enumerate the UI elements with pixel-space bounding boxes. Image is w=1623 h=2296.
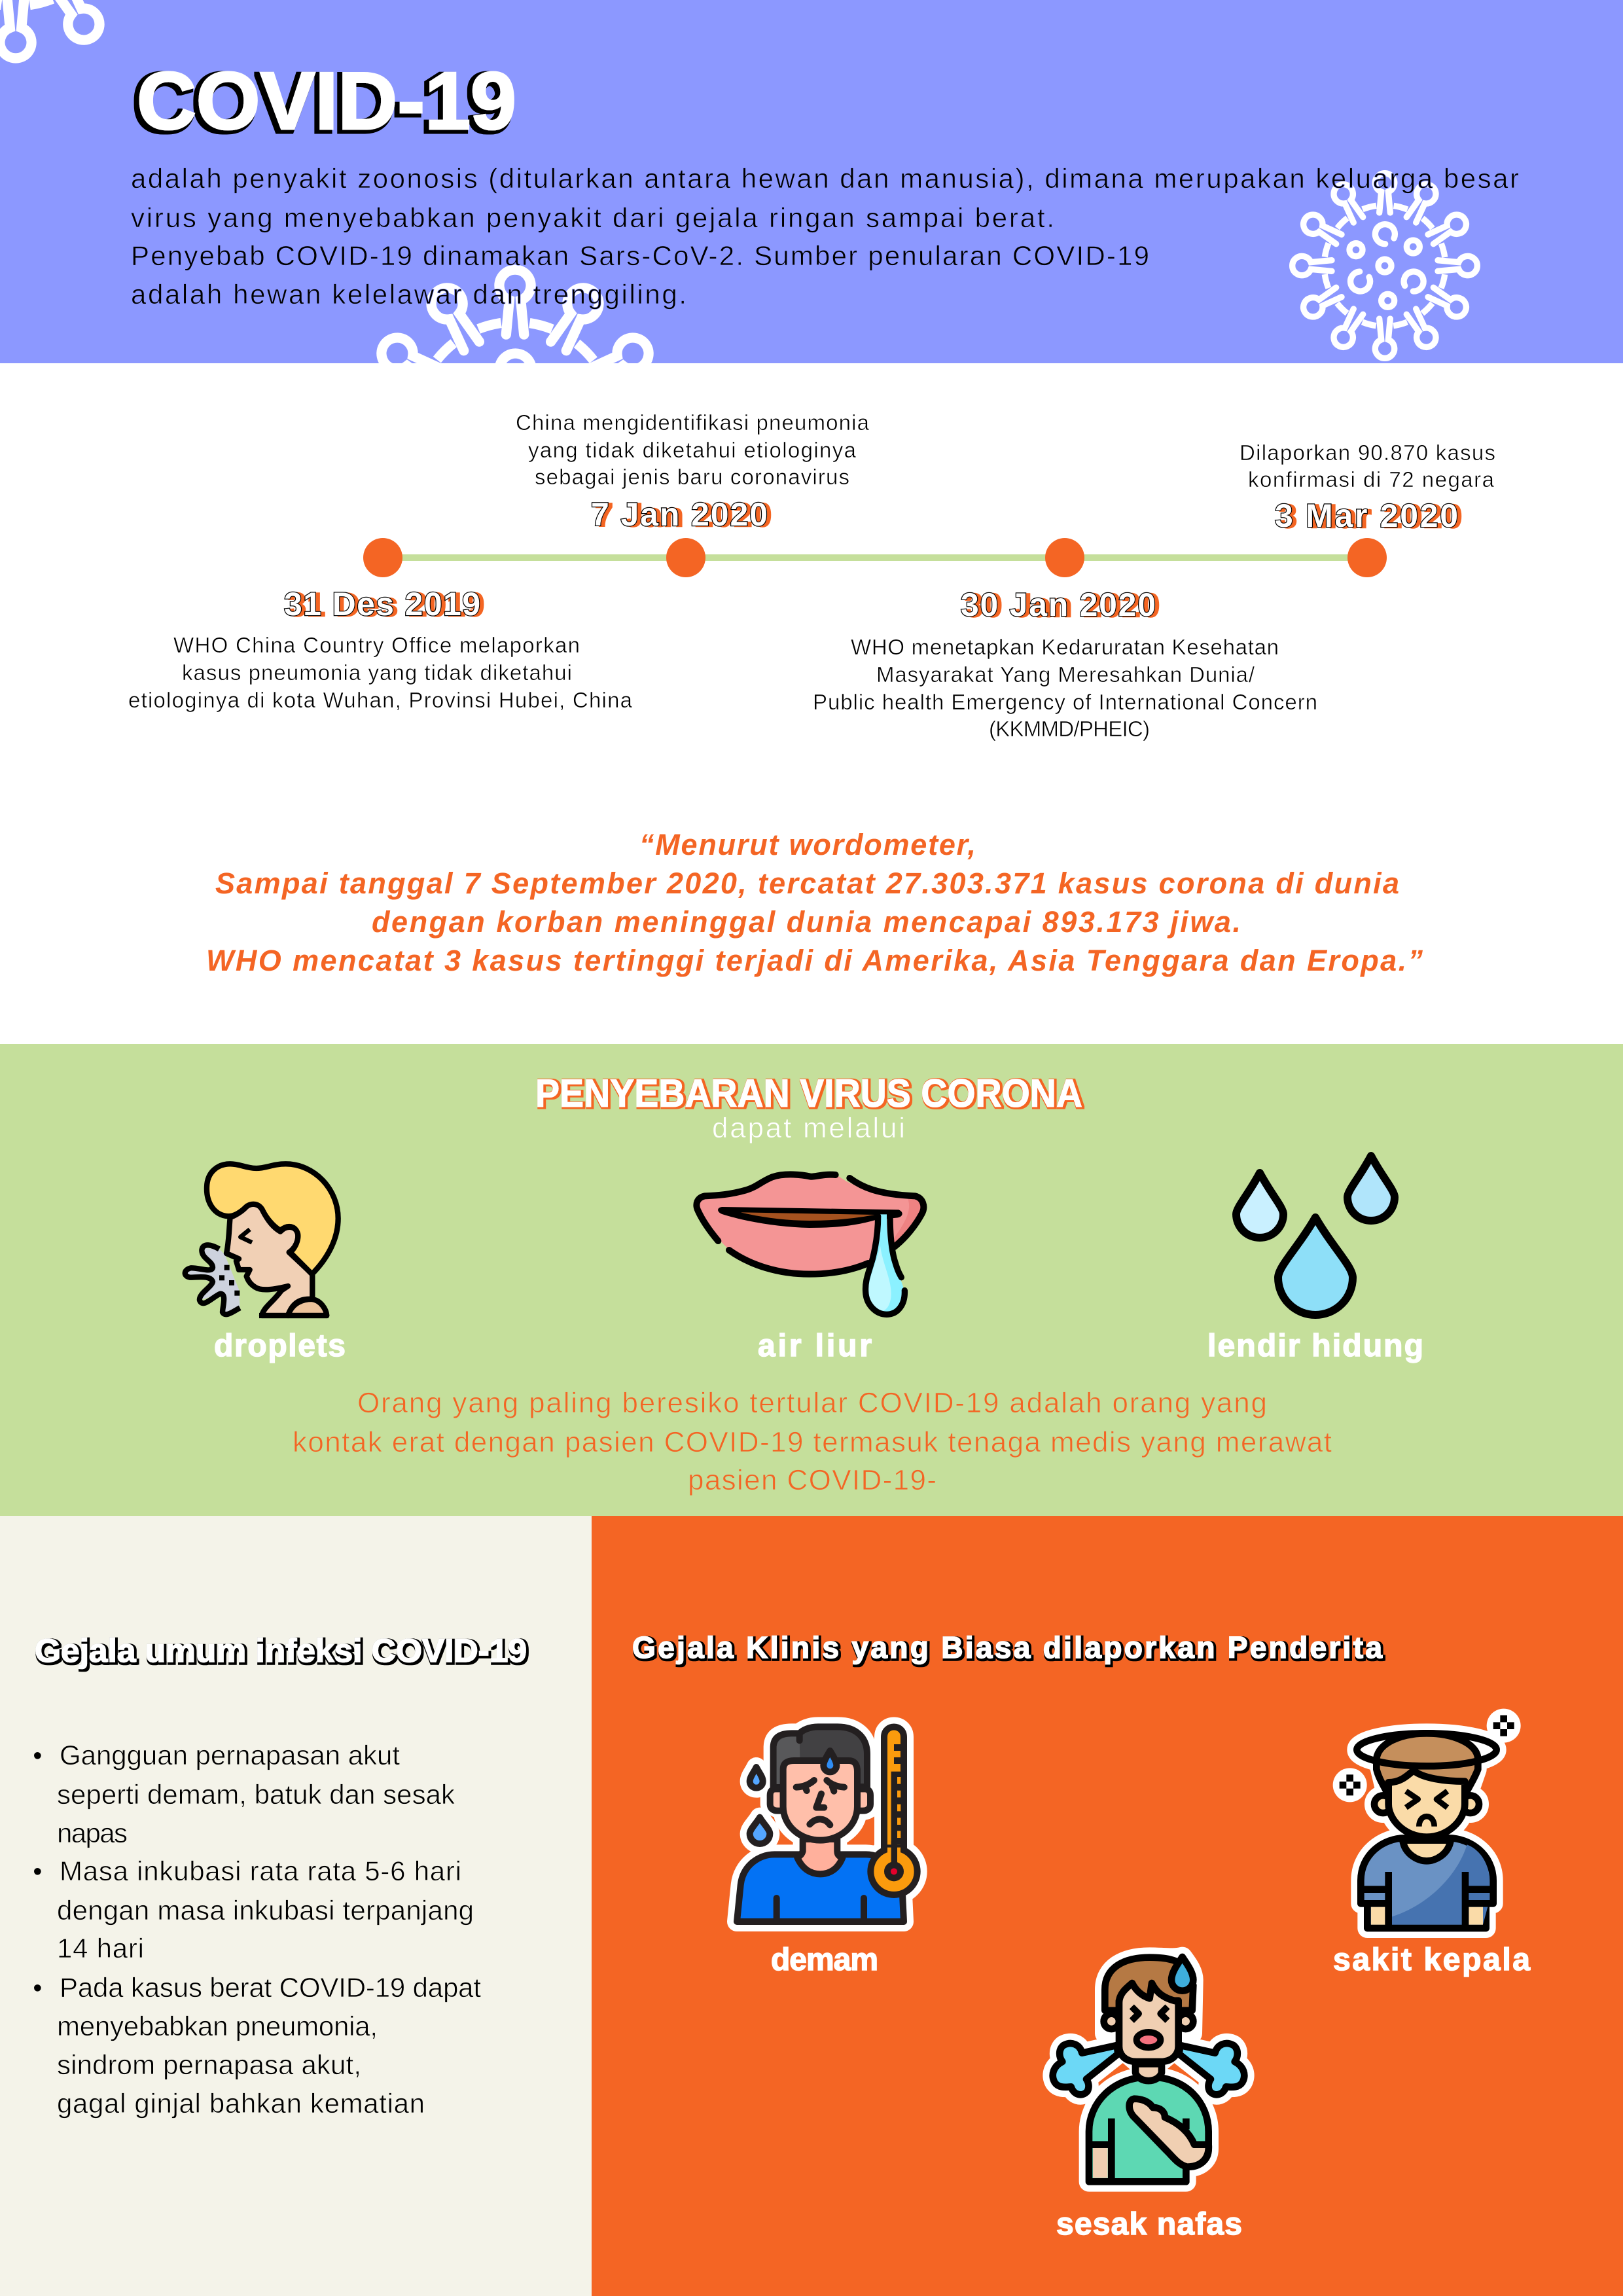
icon: lips with saliva	[696, 1174, 923, 1314]
bullet list: Pada kasus berat COVID-19 dapat	[60, 1972, 481, 2003]
text block: definition: adalah penyakit zoonosis (ditularkan antara hewan dan manusia), dimana merupakan keluarga besar	[131, 163, 1519, 194]
icon: mucus drops	[1236, 1156, 1395, 1315]
bullet list: menyebabkan pneumonia,	[57, 2011, 378, 2041]
bullet list: gagal ginjal bahkan kematian	[57, 2088, 425, 2119]
event: 30 Jan 2020	[813, 586, 1317, 741]
event: 7 Jan 2020	[516, 410, 870, 533]
subheading: dapat melalui	[712, 1112, 905, 1144]
bullet list: •	[33, 1972, 43, 2003]
panel: gejala klinis	[592, 1516, 1623, 2296]
text block: risk group: pasien COVID-19-	[688, 1464, 936, 1496]
icon: breathless person	[1053, 1957, 1244, 2181]
event: 31 Des 2019: WHO China Country Office melaporkan	[173, 633, 580, 657]
bullet list	[33, 1740, 481, 2119]
event: 31 Des 2019: etiologinya di kota Wuhan, Provinsi Hubei, China	[128, 688, 633, 712]
quote: dengan korban meninggal dunia mencapai 893.173 jiwa.	[372, 905, 1241, 939]
text block: risk group: Orang yang paling beresiko tertular COVID-19 adalah orang yang	[357, 1387, 1267, 1419]
label: sesak nafas: sesak nafas	[1056, 2207, 1242, 2242]
quote: “Menurut wordometer,	[639, 828, 976, 861]
text block: definition: Penyebab COVID-19 dinamakan Sars-CoV-2. Sumber penularan COVID-19	[131, 240, 1149, 271]
panel: gejala umum	[0, 1516, 592, 2296]
text block: risk group	[293, 1387, 1332, 1496]
text block: definition: virus yang menyebabkan penyakit dari gejala ringan sampai berat.	[131, 202, 1054, 233]
icon: virus bottom centre	[376, 264, 654, 363]
icon: virus top left	[0, 0, 105, 63]
label: lendir hidung: lendir hidung	[1207, 1329, 1423, 1363]
icon: headache person	[1333, 1709, 1521, 1928]
event: 3 Mar 2020	[1240, 440, 1495, 534]
heading: gejala umum: Gejala umum infeksi COVID-19	[35, 1632, 527, 1669]
label: demam: demam	[771, 1943, 878, 1977]
event: 3 Mar 2020: 3 Mar 2020	[1275, 497, 1458, 534]
event: 30 Jan 2020: (KKMMD/PHEIC)	[989, 717, 1150, 741]
bullet list: dengan masa inkubasi terpanjang	[57, 1895, 474, 1926]
timeline line	[383, 554, 1367, 561]
event: 31 Des 2019: kasus pneumonia yang tidak diketahui	[182, 660, 572, 685]
timeline dots	[363, 538, 1387, 577]
panel: header introduction	[0, 0, 1623, 363]
icon: virus right	[1293, 173, 1477, 358]
icon: man coughing	[185, 1164, 338, 1316]
quote: Sampai tanggal 7 September 2020, tercatat 27.303.371 kasus corona di dunia	[215, 867, 1399, 900]
event: 7 Jan 2020: China mengidentifikasi pneumonia	[516, 410, 870, 435]
event: 30 Jan 2020: WHO menetapkan Kedaruratan Kesehatan	[851, 635, 1279, 659]
quote	[206, 828, 1423, 977]
icon: fever person	[737, 1727, 918, 1922]
bullet list: seperti demam, batuk dan sesak	[57, 1779, 455, 1810]
quote: WHO mencatat 3 kasus tertinggi terjadi di Amerika, Asia Tenggara dan Eropa.”	[206, 944, 1423, 977]
event: 3 Mar 2020: Dilaporkan 90.870 kasus	[1240, 440, 1495, 465]
bullet list: Masa inkubasi rata rata 5-6 hari	[60, 1856, 461, 1886]
title: COVID-19	[137, 56, 516, 147]
text block: risk group: kontak erat dengan pasien COVID-19 termasuk tenaga medis yang merawat	[293, 1426, 1332, 1458]
bullet list: napas	[57, 1818, 128, 1848]
event: 3 Mar 2020: konfirmasi di 72 negara	[1248, 467, 1495, 492]
event: 31 Des 2019: 31 Des 2019	[284, 586, 480, 622]
label: sakit kepala: sakit kepala	[1333, 1943, 1530, 1977]
label: droplets: droplets	[214, 1329, 346, 1363]
panel: penyebaran virus corona	[0, 1044, 1623, 1516]
event: 7 Jan 2020: yang tidak diketahui etiologinya	[528, 438, 857, 462]
heading: PENYEBARAN VIRUS CORONA	[535, 1071, 1082, 1115]
text block: definition	[131, 163, 1519, 310]
text block: definition: adalah hewan kelelawar dan trenggiling.	[131, 279, 687, 310]
bullet list: Gangguan pernapasan akut	[60, 1740, 400, 1770]
bullet list: •	[33, 1856, 43, 1886]
panel: timeline	[0, 363, 1623, 1044]
event: 30 Jan 2020: 30 Jan 2020	[961, 586, 1156, 623]
label: air liur: air liur	[758, 1329, 872, 1363]
bullet list: sindrom pernapasa akut,	[57, 2049, 361, 2080]
heading: gejala klinis: Gejala Klinis yang Biasa dilaporkan Penderita	[632, 1630, 1382, 1664]
event: 7 Jan 2020: sebagai jenis baru coronavirus	[535, 465, 849, 489]
bullet list: 14 hari	[57, 1933, 144, 1964]
event: 7 Jan 2020: 7 Jan 2020	[591, 496, 768, 533]
event: 31 Des 2019	[128, 586, 633, 712]
event: 30 Jan 2020: Masyarakat Yang Meresahkan Dunia/	[876, 662, 1255, 687]
event: 30 Jan 2020: Public health Emergency of International Concern	[813, 690, 1317, 714]
bullet list: •	[33, 1740, 43, 1770]
